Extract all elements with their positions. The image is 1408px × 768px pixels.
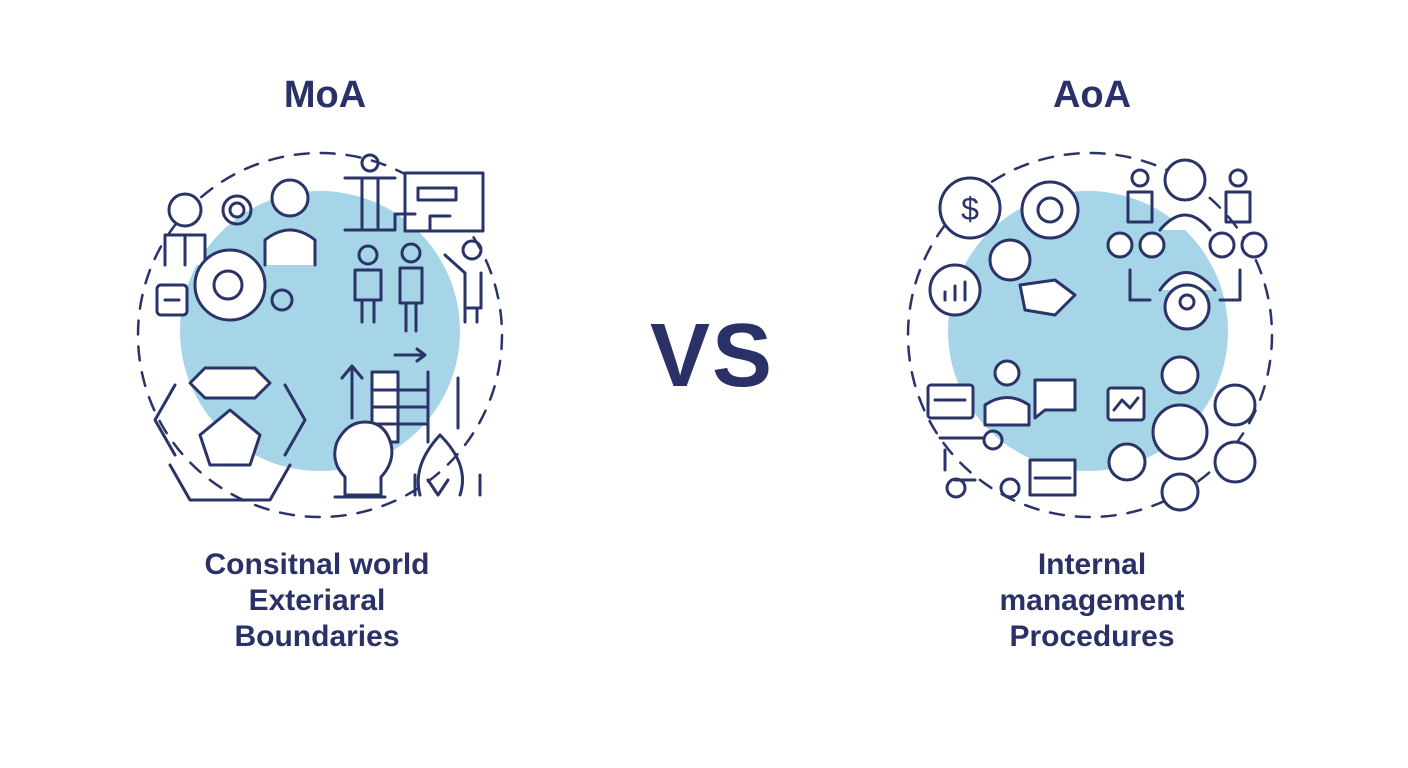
text: MoA description: Exteriaral [249,584,385,617]
text: AoA description: Internal [1038,548,1146,581]
icon group: AoA illustration: $ [961,191,979,227]
text: AoA description [999,548,1185,653]
text: MoA description: Boundaries [234,620,400,653]
text: AoA description: Procedures [1009,620,1175,653]
text: AoA description: management [999,584,1185,617]
text: MoA description [204,548,430,653]
title: AoA: AoA [1053,74,1131,116]
VS label: VS [650,306,774,406]
text: MoA description: Consitnal world [204,548,430,581]
icon group: MoA illustration [138,153,502,517]
title: MoA: MoA [284,74,366,116]
icon group: AoA illustration [908,153,1272,517]
